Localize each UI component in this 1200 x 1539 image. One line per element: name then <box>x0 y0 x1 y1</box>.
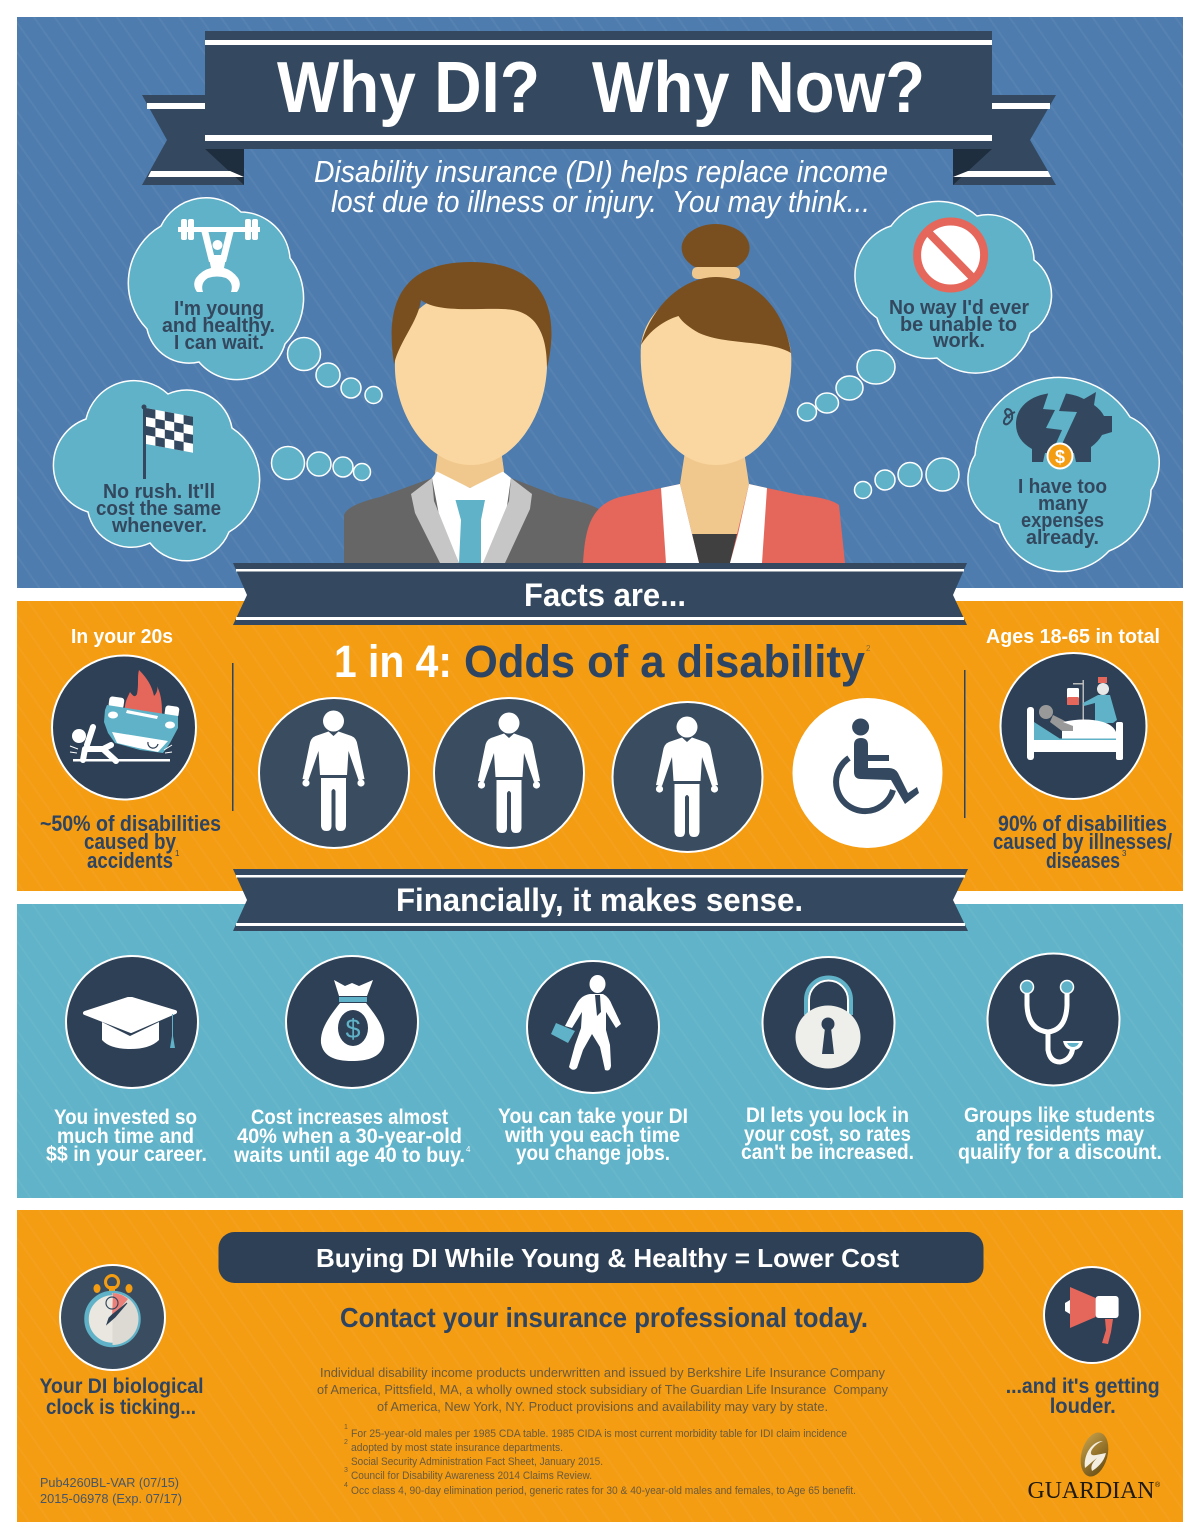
title ribbon: Why DI? <box>277 48 540 128</box>
text: footnotes <box>344 1424 856 1497</box>
thought bubbles: young <box>288 338 382 404</box>
cloud text: and healthy. <box>162 315 275 337</box>
banner: lower cost <box>218 1232 984 1283</box>
text: discounts: Groups like students <box>964 1104 1155 1127</box>
text: biological clock: Your DI biological <box>40 1375 204 1398</box>
banner: financially: Financially, it makes sense. <box>396 882 803 918</box>
thought bubbles: no way <box>798 350 895 421</box>
text: biological clock: clock is ticking... <box>46 1396 196 1419</box>
text: illness statistic: 90% of disabilities <box>998 811 1167 836</box>
heading: contact: Contact your insurance professional today. <box>340 1302 868 1333</box>
text: lock in cost <box>741 1104 914 1164</box>
cloud text: already. <box>1026 527 1099 549</box>
text: getting louder: louder. <box>1050 1395 1116 1418</box>
text: lock in cost: DI lets you lock in <box>746 1104 909 1127</box>
icon: money bag <box>286 956 418 1088</box>
cloud text <box>162 298 275 354</box>
icon: stethoscope <box>988 954 1120 1086</box>
text: take it with you: You can take your DI <box>498 1105 688 1128</box>
text: getting louder: ...and it's getting <box>1006 1375 1160 1398</box>
cloud text: be unable to <box>900 314 1017 336</box>
text: illness statistic: diseases <box>1046 848 1120 873</box>
icon: hospital bed <box>1000 653 1146 799</box>
icon: car crash <box>52 656 196 800</box>
panel: why DI intro <box>17 17 1183 588</box>
icon: weightlifter <box>178 219 260 292</box>
text: footnotes: Council for Disability Awareness 2014 Claims Review. <box>351 1470 592 1482</box>
text: discounts <box>958 1104 1162 1164</box>
coin: $ <box>1055 447 1065 467</box>
thought cloud: no way <box>855 201 1052 373</box>
banner: facts are: Facts are... <box>524 577 686 613</box>
text: take it with you: you change jobs. <box>516 1142 670 1165</box>
text: illness statistic: caused by illnesses/ <box>993 829 1172 854</box>
text: lock in cost: your cost, so rates <box>744 1123 911 1146</box>
illustration: woman <box>583 224 845 563</box>
logo: Guardian: ® <box>1155 1481 1161 1489</box>
cloud text: No way I'd ever <box>889 297 1029 319</box>
heading: 1 in 4 odds: 2 <box>866 644 871 653</box>
text: invested: You invested so <box>54 1106 197 1129</box>
icon: person 1 <box>259 698 409 848</box>
icon: checkered flag <box>142 404 193 479</box>
text: footnotes: 3 <box>344 1467 348 1474</box>
text: take it with you <box>498 1105 688 1165</box>
text: invested <box>46 1106 207 1166</box>
subtitle: lost due to illness or injury. You may think... <box>331 184 870 219</box>
text: footnotes: Occ class 4, 90-day elimination period, generic rates for 30 & 40-year-old males and females, to Age 65 benefit. <box>351 1485 856 1497</box>
heading: ages 18-65: Ages 18-65 in total <box>986 626 1160 648</box>
text: biological clock <box>40 1375 204 1419</box>
icon: walking businessperson <box>527 961 659 1093</box>
thought bubbles: expenses <box>854 458 959 498</box>
text: footnotes: 4 <box>344 1482 348 1489</box>
text: footnotes: adopted by most state insurance departments. <box>351 1442 563 1454</box>
cloud text: I can wait. <box>174 332 264 354</box>
icon: padlock <box>762 957 894 1089</box>
icon: person 2 <box>434 698 584 848</box>
thought bubbles: no rush <box>272 446 370 480</box>
panel: call to action <box>17 1210 1183 1522</box>
heading: 1 in 4 odds: 1 in 4: <box>334 636 452 687</box>
cloud text: whenever. <box>111 515 207 537</box>
text: disclaimer <box>317 1365 888 1414</box>
text: accident statistic: caused by <box>84 829 177 854</box>
text: getting louder <box>1006 1375 1160 1418</box>
logo mark <box>1076 1429 1113 1480</box>
text: footnotes: For 25-year-old males per 1985 CDA table. 1985 CIDA is most current morbidity table for IDI claim incidence <box>351 1428 847 1440</box>
text: illness statistic: 3 <box>1122 849 1127 858</box>
banner: financially <box>233 869 968 931</box>
heading: in your 20s: In your 20s <box>71 626 173 648</box>
text: cost increases: waits until age 40 to buy. <box>233 1144 465 1167</box>
cloud text <box>96 481 221 537</box>
cloud text: expenses <box>1021 510 1104 532</box>
cloud text: many <box>1038 493 1089 515</box>
illustration: man <box>344 262 600 563</box>
cloud text: work. <box>932 330 985 352</box>
text: invested: $$ in your career. <box>46 1143 207 1166</box>
icon: money bag: $ <box>345 1014 361 1044</box>
icon: broken piggy bank <box>1004 391 1112 468</box>
text: discounts: and residents may <box>976 1123 1144 1146</box>
subtitle <box>314 154 888 219</box>
cloud text <box>889 297 1029 352</box>
text: accident statistic: ~50% of disabilities <box>40 811 221 836</box>
text: footnotes: 2 <box>344 1439 348 1446</box>
logo: Guardian: GUARDIAN <box>1028 1478 1154 1504</box>
heading: 1 in 4 odds: Odds of a disability <box>464 636 865 687</box>
cloud text <box>1018 476 1107 549</box>
icon: megaphone <box>1044 1267 1140 1363</box>
thought cloud: no rush <box>53 381 260 561</box>
text: invested: much time and <box>57 1125 194 1148</box>
text: publication number <box>40 1475 182 1506</box>
text: illness statistic <box>993 811 1172 873</box>
text: accident statistic: accidents <box>87 848 173 873</box>
text: cost increases: 4 <box>466 1145 471 1154</box>
text: cost increases: Cost increases almost <box>251 1106 448 1129</box>
icon: person 3 <box>612 702 762 852</box>
icon: stopwatch <box>60 1265 165 1370</box>
logo: Guardian <box>1028 1429 1161 1504</box>
text: discounts: qualify for a discount. <box>958 1141 1162 1164</box>
icon: graduation cap <box>66 956 198 1088</box>
text: footnotes: 1 <box>344 1424 348 1431</box>
text: cost increases: 40% when a 30-year-old <box>237 1125 462 1148</box>
text: disclaimer: Individual disability income products underwritten and issued by Berkshire Life Insurance Company <box>320 1365 885 1380</box>
banner: lower cost: Buying DI While Young & Healthy = Lower Cost <box>316 1243 899 1273</box>
text: publication number: Pub4260BL-VAR (07/15) <box>40 1475 179 1490</box>
title ribbon: Why Now? <box>592 48 925 128</box>
thought cloud: expenses <box>968 377 1159 572</box>
text: lock in cost: can't be increased. <box>741 1141 914 1164</box>
text: accident statistic: 1 <box>175 849 180 858</box>
text: disclaimer: of America, Pittsfield, MA, a wholly owned stock subsidiary of The Guardian Life Insurance Company <box>317 1382 888 1397</box>
cloud text: No rush. It'll <box>103 481 215 503</box>
text: disclaimer: of America, New York, NY. Product provisions and availability may vary by state. <box>377 1399 828 1414</box>
cloud text: I have too <box>1018 476 1107 498</box>
text: footnotes: Social Security Administration Fact Sheet, January 2015. <box>351 1456 603 1468</box>
cloud text: I'm young <box>174 298 264 320</box>
text: accident statistic <box>40 811 221 873</box>
banner: facts are <box>233 563 967 625</box>
subtitle: Disability insurance (DI) helps replace income <box>314 154 888 189</box>
panel: financially it makes sense <box>17 904 1183 1198</box>
panel: odds of disability <box>17 601 1183 891</box>
title ribbon <box>142 31 1056 185</box>
text: cost increases <box>233 1106 471 1167</box>
icon: prohibited sign <box>917 222 984 288</box>
text: take it with you: with you each time <box>504 1124 680 1147</box>
cloud text: cost the same <box>96 498 221 520</box>
text: publication number: 2015-06978 (Exp. 07/17) <box>40 1491 182 1506</box>
thought cloud: young and healthy <box>128 198 304 380</box>
icon: wheelchair <box>792 698 942 848</box>
